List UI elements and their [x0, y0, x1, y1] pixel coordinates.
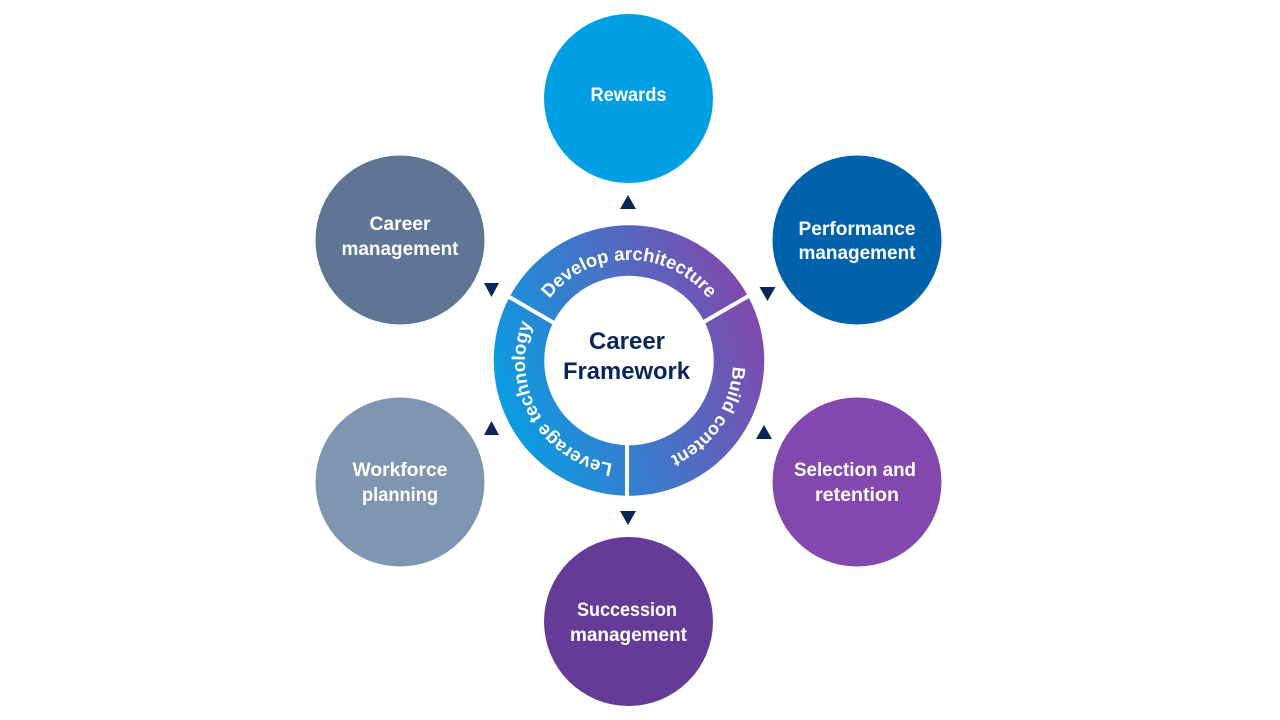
- arrow: to Succession management: [620, 511, 636, 525]
- circle: Performance management: [772, 156, 942, 324]
- ring label: Develop architecture: Develop architecture: [540, 248, 714, 298]
- circle: Performance management: Performance: [798, 219, 916, 240]
- arrow: to Selection and retention: [756, 425, 772, 439]
- circle: Selection and retention: [772, 398, 942, 566]
- circle: Career management: Career: [370, 214, 431, 235]
- circle: Succession management: management: [570, 625, 688, 646]
- circle: Career management: management: [342, 239, 459, 260]
- circle: Performance management: management: [798, 243, 916, 264]
- circle: Career management: [316, 156, 484, 324]
- circle: Succession management: Succession: [577, 600, 677, 621]
- center title: Framework: [563, 358, 691, 385]
- circle: Succession management: [544, 537, 713, 706]
- center title: [563, 328, 691, 385]
- circle: Workforce planning: planning: [362, 485, 438, 506]
- ring: segmented gradient ring: [494, 225, 764, 496]
- circle: Selection and retention: retention: [815, 485, 899, 506]
- arrow: to Workforce planning: [484, 421, 499, 435]
- arrow: to Rewards: [620, 195, 636, 209]
- arrow: to Career management: [484, 283, 499, 297]
- center title: Career: [589, 328, 665, 355]
- ring label: Leverage technology: Leverage technology: [512, 320, 612, 476]
- circle: Selection and retention: Selection and: [794, 460, 916, 481]
- circle: Rewards: [544, 14, 713, 183]
- circle: Workforce planning: [316, 398, 484, 566]
- ring label: Build content: Build content: [670, 368, 746, 466]
- circle: Workforce planning: Workforce: [352, 460, 448, 481]
- arrow: to Performance management: [760, 287, 776, 301]
- circle: Rewards: Rewards: [590, 85, 666, 106]
